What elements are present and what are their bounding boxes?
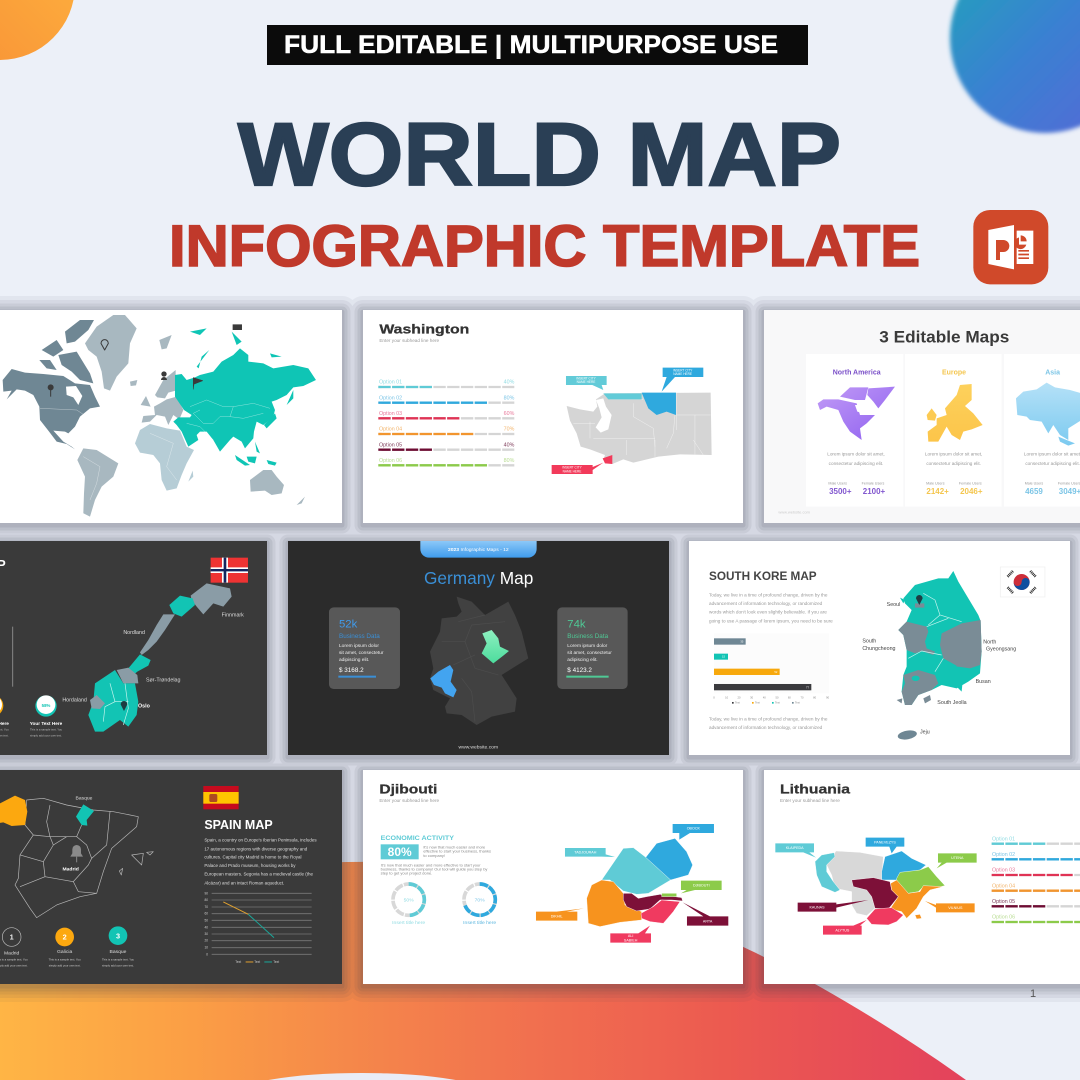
panel drop shadows (0, 312, 1080, 986)
slide background (288, 541, 669, 755)
slide background (363, 770, 743, 984)
card: Asia: Lorem ipsum dolor sit amet, (1024, 452, 1080, 457)
heading: Djibouti (379, 781, 437, 796)
heading: Germany Map (424, 568, 533, 588)
region labels: Oslo (138, 703, 151, 709)
line chart: 70 (204, 905, 208, 909)
option bars: Option 02 (992, 852, 1015, 858)
economic activity block: 80% (388, 845, 412, 859)
bar chart: 35 (740, 640, 744, 644)
donut chart: 50% (392, 884, 425, 926)
legend item 3: Basque: This is a sample text. You (102, 957, 134, 961)
Spain map: Basque (76, 795, 93, 801)
paragraph: going to use A passage of lorem ipsum, you need to be sure (709, 618, 833, 623)
callouts: TADJOURAH (574, 851, 597, 855)
line chart: 80 (204, 898, 208, 902)
line chart (204, 891, 312, 964)
panel: Norway slide (0, 541, 267, 755)
bar chart: Text (755, 701, 760, 705)
region labels: South Jeolla (937, 700, 967, 706)
data card: right: $ 4123.2 (567, 667, 592, 674)
callouts: NAME HERE (673, 372, 692, 376)
progress badge: yellow (0, 695, 9, 738)
option bars: Option 01 (379, 380, 402, 386)
closing paragraph (709, 717, 828, 730)
donut chart: 50%: Insert title here (392, 920, 425, 926)
legend item 1: Madrid: 1 (10, 933, 14, 942)
heading: Washington (379, 322, 469, 336)
callouts: INSERT CITY (673, 368, 693, 372)
panel: Washington slide (363, 310, 743, 523)
bar chart: 60 (788, 695, 791, 699)
icon: PowerPoint logo (973, 210, 1048, 284)
paragraph: European masters. Segovia has a medieval castle (the (204, 872, 313, 877)
region labels (862, 602, 1016, 736)
panel: Lithuania slide (764, 770, 1080, 984)
callouts: KLAIPEDA (786, 846, 804, 850)
donut chart: 70% (463, 884, 496, 926)
data card: left: 52k (339, 618, 358, 630)
world map (3, 315, 316, 517)
card: North America: consectetur adipiscing elit. (829, 461, 883, 466)
heading: Lithuania (780, 781, 851, 796)
panel: 3 editable maps slide (764, 310, 1080, 523)
panel: world map slide (0, 310, 342, 523)
line chart: 0 (206, 952, 208, 956)
subheading: Enter your subhead line here (379, 798, 440, 803)
top tab: 2023 Infographic Maps - 12 (448, 547, 509, 553)
economic activity block: ECONOMIC ACTIVITY (381, 835, 455, 842)
donut chart: 70%: 70% (475, 897, 485, 903)
paragraph: Today, we live in a time of profound change, driven by the (709, 593, 828, 598)
donut chart: 50%: 50% (404, 897, 414, 903)
Spain map (0, 795, 153, 918)
card: Asia: consectetur adipiscing elit. (1025, 461, 1080, 466)
bar chart: Text (795, 701, 800, 705)
callouts: DIKHIL (551, 914, 563, 918)
heading: SPAIN MAP (204, 818, 273, 832)
economic activity block: step to get your project done. (381, 871, 432, 876)
flag: Norway (211, 558, 248, 583)
line chart: 50 (204, 918, 208, 922)
orange corner circle (0, 0, 75, 60)
light curve at bottom edge (234, 1073, 490, 1080)
slide background (689, 541, 1070, 755)
subtitle: infographic template: INFOGRAPHIC TEMPLATE (169, 214, 920, 279)
option bars: Option 02 (379, 395, 402, 401)
region labels: Finnmark (222, 613, 244, 619)
option bars: Option 03 (992, 868, 1015, 874)
progress badge: teal: Your Text Here (30, 721, 63, 726)
blue corner circle (950, 0, 1080, 133)
paragraph: 17 autonomous regions with diverse geography and (204, 846, 308, 851)
page number: 1 (1030, 988, 1036, 1000)
Germany map (430, 597, 528, 725)
Djibouti map (587, 838, 693, 927)
line chart: 40 (204, 925, 208, 929)
callouts: UTENA (951, 856, 964, 860)
paragraph: cultures. Capital city Madrid is home to the Royal (204, 855, 302, 860)
callouts: NAME HERE (563, 469, 581, 473)
paragraph: words which don't look even slightly believable. If you are (709, 610, 827, 615)
flag: South Korea (1000, 567, 1045, 597)
card: Europe: consectetur adipiscing elit. (926, 461, 981, 466)
bar chart: 10 (725, 695, 729, 699)
region labels: Busan (976, 679, 991, 685)
callouts: SABIEH (624, 938, 638, 942)
heading: SOUTH KORE MAP (709, 569, 817, 583)
economic activity block (381, 835, 491, 876)
legend item 2: Galicia: This is a sample text. You (49, 957, 81, 961)
closing paragraph: advancement of information technology, or randomized (709, 725, 823, 730)
option bars: Option 05 (379, 442, 402, 448)
line chart: 20 (204, 939, 208, 943)
option bars: Option 04 (379, 427, 402, 433)
card: Europe: Female Users (959, 481, 982, 485)
card: North America: Male Users (828, 481, 847, 485)
region labels: Jeju (920, 730, 930, 736)
data card: left: adipiscing elit. (339, 657, 369, 663)
website footer: www.website.com (778, 510, 811, 515)
Washington map (567, 393, 712, 464)
callouts: PANEVEZYS (874, 840, 896, 844)
card: North America: 2100+ (863, 487, 886, 496)
data card: right (557, 607, 628, 689)
option bars: 80% (504, 395, 515, 401)
card: Asia: Male Users (1025, 481, 1043, 485)
region labels: Gyeongsang (986, 646, 1016, 652)
callouts: VILNIUS (948, 906, 963, 910)
option bars (992, 836, 1080, 922)
economic activity block: business, thanks to company! Our tool will guide you step by (381, 866, 487, 871)
legend item 2: Galicia (49, 928, 81, 967)
data card: right: sit amet, consectetur (567, 650, 612, 656)
data card: right: Lorem ipsum dolor (567, 643, 608, 649)
bar chart: 77 (806, 685, 809, 689)
option bars: Option 01 (992, 836, 1015, 842)
option bars: Option 04 (992, 883, 1015, 889)
bar chart: 30 (750, 695, 754, 699)
callouts: OBOCK (687, 827, 700, 831)
region labels (62, 613, 244, 709)
panel: South Korea slide (689, 541, 1070, 755)
option bars: Option 06 (992, 915, 1015, 921)
progress badge: teal: 58% (42, 703, 50, 708)
callouts (536, 824, 728, 943)
economic activity block: effective to start your business, thanks (423, 849, 491, 854)
paragraph: Spain, a country on Europe's Iberian Peninsula, includes (204, 838, 317, 843)
card: North America: North America (833, 370, 881, 377)
line chart: Text (273, 960, 279, 964)
bar chart: 52 (774, 670, 778, 674)
Lithuania map (815, 851, 945, 925)
data card: left: sit amet, consectetur (339, 650, 384, 656)
legend item 3: Basque (102, 926, 134, 967)
card: Europe: 2142+ (926, 487, 949, 496)
option bars: Option 05 (992, 899, 1015, 905)
banner: full editable (267, 25, 808, 65)
data card: left: Lorem ipsum dolor (339, 643, 379, 649)
option bars: 40% (504, 442, 515, 448)
line chart: Text (235, 960, 241, 964)
website footer: www.website.com (459, 744, 498, 750)
card: Asia: 4659 (1025, 487, 1043, 496)
bar chart: 90 (826, 695, 830, 699)
callouts: ALI (628, 934, 633, 938)
top tab (420, 541, 537, 558)
divider line (11, 627, 14, 687)
legend item 3: Basque: 3 (116, 931, 120, 940)
legend item 2: Galicia: 2 (63, 933, 67, 942)
callouts (775, 838, 977, 935)
option bars: Option 03 (379, 411, 402, 417)
option bars: 80% (504, 458, 515, 464)
bar chart: 70 (801, 695, 804, 699)
economic activity block: It's now that much easier and more (423, 845, 486, 850)
banner: full editable: FULL EDITABLE | MULTIPURPOSE USE (284, 31, 778, 59)
slide background (764, 770, 1080, 984)
option bars: 40% (504, 380, 515, 386)
region labels: Sør-Trøndelag (146, 678, 180, 684)
callouts: DJIBOUTI (693, 883, 710, 887)
slide background (363, 310, 743, 523)
bar chart (713, 633, 830, 705)
paragraph (709, 593, 833, 623)
heading: 3 Editable Maps (879, 327, 1009, 346)
gradient hill background shape (0, 862, 966, 1080)
slide background (0, 310, 342, 523)
legend item 1: Madrid (0, 928, 28, 967)
card: North America: Lorem ipsum dolor sit amet, (827, 452, 885, 457)
card: Europe: Lorem ipsum dolor sit amet, (925, 452, 982, 457)
economic activity block: to company! (423, 853, 445, 858)
data card: right: 74k (567, 618, 586, 630)
bar chart: 20 (738, 695, 741, 699)
region labels: Nordland (123, 630, 145, 636)
region labels: Chungcheong (862, 646, 896, 652)
data card: left: Business Data (339, 633, 380, 640)
donut chart: 70%: Insert title here (463, 920, 496, 926)
card: Europe: Male Users (926, 481, 945, 485)
closing paragraph: Today, we live in a time of profound change, driven by the (709, 717, 828, 722)
paragraph: advancement of information technology, or randomized (709, 601, 823, 606)
option bars (378, 380, 515, 465)
bar chart: 80 (813, 695, 817, 699)
legend item 3: Basque: Basque (110, 949, 127, 955)
card: Asia (1004, 354, 1080, 507)
callouts: INSERT CITY (576, 376, 597, 380)
bar chart: Text (775, 701, 780, 705)
data card: left: $ 3168.2 (339, 667, 364, 674)
bar chart: 40 (763, 695, 766, 699)
paragraph: Palace and Prado museum, housing works by (204, 863, 296, 868)
data card: left (329, 607, 400, 689)
legend item 1: Madrid: Madrid (4, 950, 20, 956)
line chart: 30 (204, 932, 208, 936)
title: world map: WORLD MAP (238, 104, 841, 204)
bar chart: Text (735, 701, 740, 705)
bar chart: 0 (713, 695, 715, 699)
Norway map (88, 583, 232, 732)
economic activity block: It's now that much easier and more effective to start your (381, 862, 481, 867)
card: Europe: Europe (942, 370, 966, 377)
bar chart: 15 (722, 655, 726, 659)
paragraph (204, 838, 317, 885)
South Korea map (897, 571, 982, 741)
card: Asia: Asia (1045, 370, 1060, 377)
option bars: 70% (504, 427, 515, 433)
slide background (0, 770, 342, 984)
subheading: Enter your subhead line here (780, 798, 840, 803)
card: North America: Female Users (862, 481, 885, 485)
option bars: 60% (504, 411, 515, 417)
callouts: KAUNAS (809, 905, 825, 909)
callouts: ALYTUS (835, 928, 850, 932)
line chart: Text (254, 960, 260, 964)
callouts: INSERT CITY (562, 466, 583, 470)
slide background (0, 541, 267, 755)
line chart: 90 (204, 891, 208, 895)
bar chart: 50 (776, 695, 779, 699)
line chart: 10 (204, 946, 208, 950)
region labels: South (862, 639, 876, 645)
callouts (552, 368, 703, 474)
flag: Spain (203, 786, 239, 809)
callouts: NAME HERE (577, 380, 595, 384)
data card: right: Business Data (567, 633, 609, 640)
Spain map: Madrid (62, 866, 79, 872)
progress badge: teal (30, 695, 63, 738)
slide background (764, 310, 1080, 523)
progress badge: teal: This is a sample text. You (30, 728, 62, 732)
region labels: North (983, 639, 996, 645)
legend item 3: Basque: simply add your own text. (102, 963, 134, 967)
panel: Djibouti slide (363, 770, 743, 984)
paragraph: Alcázar) and an intact Roman aqueduct. (204, 880, 284, 885)
panel: Germany slide (288, 541, 669, 755)
legend item 2: Galicia: Galicia (57, 949, 72, 955)
legend item 2: Galicia: simply add your own text. (49, 963, 81, 967)
map pins and flags (48, 324, 242, 397)
card: North America (806, 354, 903, 507)
panel: Spain slide (0, 770, 342, 984)
callouts: ARTA (703, 919, 713, 923)
card: Europe (905, 354, 1002, 507)
option bars: Option 06 (379, 458, 402, 464)
progress badge: teal: simply add your own text. (30, 734, 62, 738)
region labels: Hordaland (62, 698, 87, 704)
card: Europe: 2046+ (960, 487, 983, 496)
region labels: Seoul (887, 602, 900, 608)
data card: right: adipiscing elit. (567, 657, 598, 663)
card: North America: 3500+ (829, 487, 852, 496)
subheading: Enter your subhead line here (379, 338, 440, 343)
line chart: 60 (204, 912, 208, 916)
